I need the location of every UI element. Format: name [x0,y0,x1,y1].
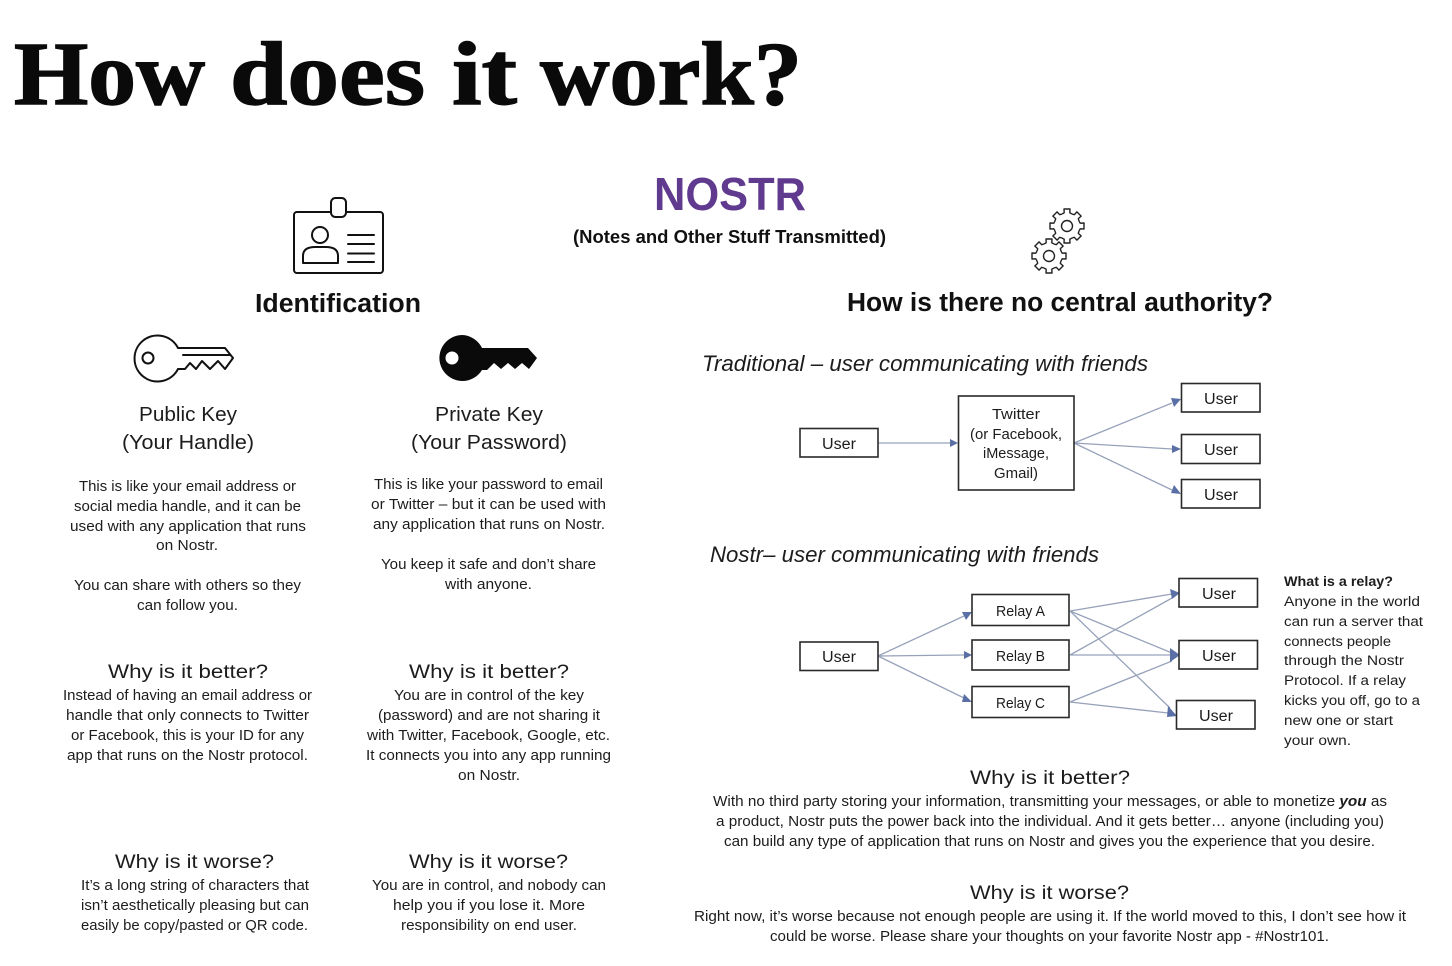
node: recipient user 3: User [1199,708,1233,725]
text: private key why worse [372,851,606,934]
text: public key description: can follow you. [137,598,238,614]
node: relay A [972,594,1069,626]
heading: NOSTR: NOSTR [654,168,806,220]
text: private key why worse: help you if you lose it. More [393,898,585,914]
text: public key why better [63,661,312,764]
text: central authority why better [713,767,1387,850]
text: private key why worse: You are in control, and nobody can [372,878,606,894]
text: central authority why better: With no third party storing your information, transmitting your messages, or able to monetize you as [713,794,1387,810]
text: public key why worse: It’s a long string of characters that [81,878,309,894]
icon: ID badge [294,198,383,273]
text: central authority why worse [694,882,1406,945]
callout: what is a relay: through the Nostr [1284,653,1404,669]
text: public key description: social media handle, and it can be [74,499,301,515]
key name: public [122,403,254,454]
node: Twitter: Gmail) [994,466,1038,482]
key name: private [411,403,567,454]
text: private key why worse: responsibility on end user. [401,918,577,934]
text: public key why worse: isn’t aesthetically pleasing but can [81,898,309,914]
text: public key why better: app that runs on the Nostr protocol. [67,748,308,764]
text: public key why worse: Why is it worse? [115,851,274,873]
callout: what is a relay: kicks you off, go to a [1284,693,1420,709]
text: private key description: You keep it safe and don’t share [381,557,596,573]
text: public key description: used with any application that runs [70,519,306,535]
icon: solid key [439,335,537,381]
text: private key why better: on Nostr. [458,768,520,784]
text: private key why better: Why is it better? [409,661,569,683]
callout: what is a relay: can run a server that [1284,614,1423,630]
node: user: User [822,436,856,453]
text: private key why better: (password) and are not sharing it [378,708,600,724]
title: it [452,25,517,124]
diagram: nostr [800,578,1258,729]
title [14,25,802,124]
text: central authority why better: Why is it better? [970,767,1130,789]
key name: private: (Your Password) [411,431,567,454]
subheading: nostr: Nostr– user communicating with friends [710,542,1099,567]
text: central authority why worse: Right now, it’s worse because not enough people are using it. If the world moved to this, I don’t see how it [694,909,1406,925]
text: central authority why worse: could be worse. Please share your thoughts on your favorite Nostr app - #Nostr101. [770,929,1329,945]
text: public key why better: Why is it better? [108,661,268,683]
node: recipient user 2: User [1202,648,1236,665]
text: private key why better: You are in control of the key [394,688,585,704]
text: private key description: This is like your password to email [374,477,603,493]
node: recipient user 1: User [1202,586,1236,603]
text: private key description: with anyone. [444,577,532,593]
icon: gears [1032,209,1084,273]
node: Twitter: (or Facebook, [970,427,1062,443]
icon: outline key [135,336,233,381]
text: public key description: on Nostr. [156,538,218,554]
node: relay B [972,640,1069,670]
text: public key why worse: easily be copy/pasted or QR code. [81,918,308,934]
callout: what is a relay: your own. [1284,733,1351,749]
key name: private: Private Key [435,403,544,426]
callout: what is a relay: Anyone in the world [1284,594,1420,610]
text: private key description [371,477,606,593]
text: public key why better: or Facebook, this is your ID for any [71,728,305,744]
text: private key description: or Twitter – but it can be used with [371,497,606,513]
text: public key description: You can share with others so they [74,578,302,594]
heading: NOSTR: (Notes and Other Stuff Transmitted) [573,227,886,247]
node: relay C: Relay C [996,696,1045,712]
arrows: nostr [878,589,1180,717]
subheading: traditional: Traditional – user communicating with friends [702,351,1148,376]
node: user 3 [1182,480,1260,508]
node: user [800,428,878,457]
arrows: traditional [878,398,1181,494]
callout: what is a relay: Protocol. If a relay [1284,673,1407,689]
text: private key why better: It connects you into any app running [366,748,611,764]
node: Twitter: Twitter [992,407,1040,423]
heading: NOSTR [573,168,886,247]
node: user 1: User [1204,391,1238,408]
text: central authority why better: a product, Nostr puts the power back into the individual. And it gets better… anyone (including you) [716,814,1384,830]
column: public key [63,336,312,934]
heading: central authority: How is there no central authority? [847,289,1273,317]
text: central authority why worse: Why is it worse? [970,882,1129,904]
callout: what is a relay: new one or start [1284,713,1393,729]
column: private key [366,335,611,934]
callout: what is a relay: What is a relay? [1284,574,1393,590]
text: central authority why better: can build any type of application that runs on Nostr and gives you the experience that you desire. [724,834,1375,850]
node: Twitter [958,396,1074,490]
text: private key why better [366,661,611,784]
text: private key description: any application that runs on Nostr. [373,517,605,533]
heading: identification: Identification [255,290,421,318]
node: Twitter: iMessage, [983,446,1049,462]
panel: central authority [694,209,1423,945]
node: relay B: Relay B [996,649,1045,665]
node: recipient user 2 [1179,640,1258,669]
node: relay A: Relay A [996,604,1045,620]
key name: public: Public Key [139,403,238,426]
node: sender user [800,642,878,670]
callout: what is a relay: connects people [1284,634,1391,650]
panel: identification [63,198,1423,945]
callout: what is a relay [1284,574,1423,749]
text: public key why worse [81,851,309,934]
node: relay C [972,686,1069,718]
text: private key why better: with Twitter, Facebook, Google, etc. [366,728,610,744]
key name: public: (Your Handle) [122,431,254,454]
node: user 2: User [1204,442,1238,459]
node: user 2 [1182,434,1260,464]
diagram: traditional [800,384,1260,508]
text: public key description: This is like your email address or [79,479,296,495]
node: sender user: User [822,649,856,666]
title: How [14,25,205,124]
node: user 3: User [1204,487,1238,504]
title: work? [540,25,802,124]
text: private key why worse: Why is it worse? [409,851,568,873]
text: public key description [70,479,306,614]
node: user 1 [1182,384,1260,412]
node: recipient user 3 [1176,700,1255,729]
title: does [230,25,425,124]
text: public key why better: handle that only connects to Twitter [66,708,309,724]
text: public key why better: Instead of having an email address or [63,688,312,704]
node: recipient user 1 [1179,578,1258,607]
